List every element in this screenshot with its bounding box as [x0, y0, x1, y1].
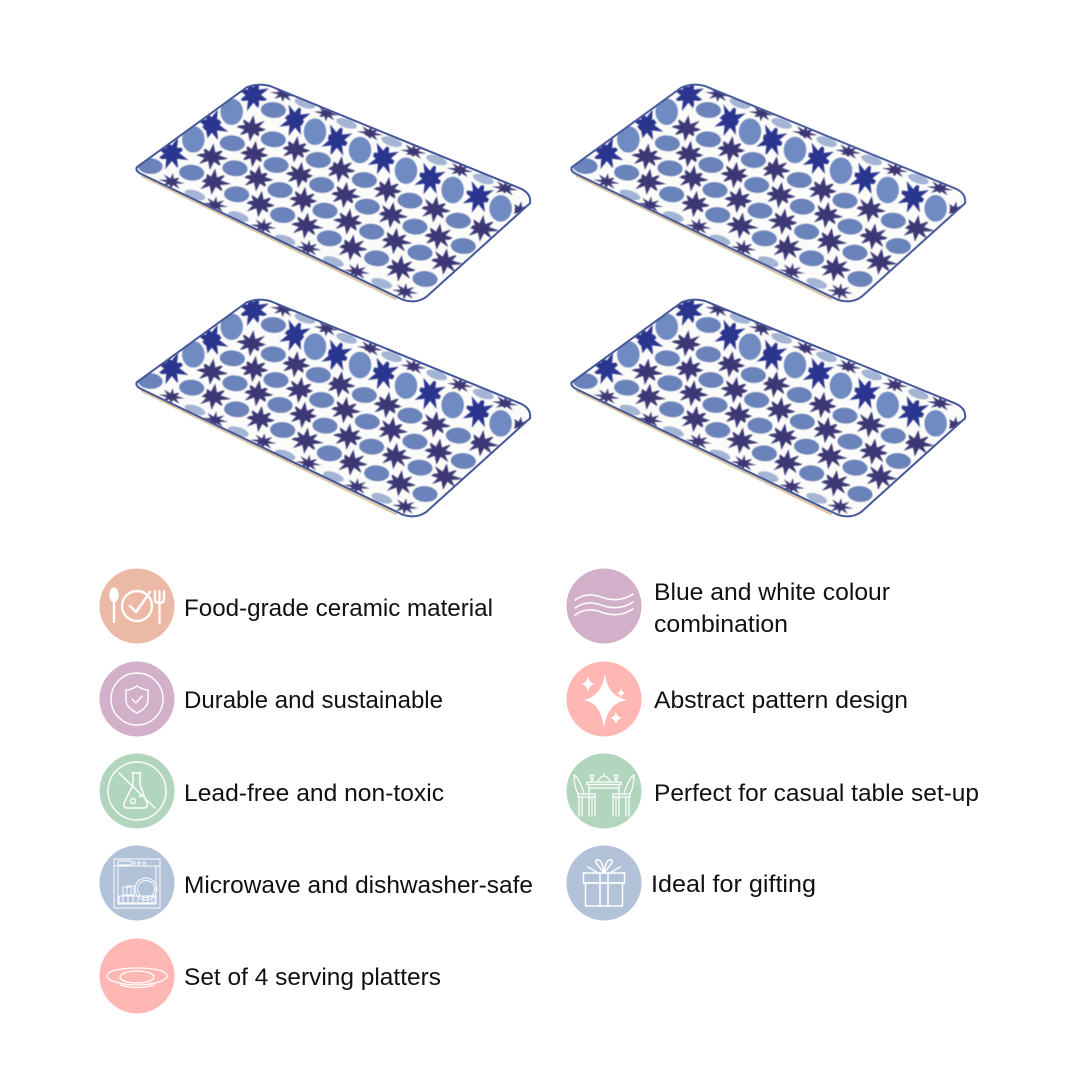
- feature: food-grade ceramic material: [100, 568, 493, 644]
- platter: top right: [570, 72, 969, 302]
- icon: crossed-out flask: [100, 754, 174, 828]
- icon: waves: [566, 568, 642, 644]
- label: table set-up: Perfect for casual table set-up: [654, 780, 979, 807]
- platter: bottom left: [135, 287, 534, 517]
- label: set of 4: Set of 4 serving platters: [184, 964, 441, 991]
- platter: bottom right: [570, 287, 969, 517]
- feature: abstract pattern design: [566, 662, 908, 736]
- label: colour combination: [654, 579, 890, 638]
- label: durable: Durable and sustainable: [184, 687, 443, 714]
- icon: gift box: [566, 846, 642, 920]
- label: gifting: Ideal for gifting: [651, 871, 816, 898]
- label: lead-free: Lead-free and non-toxic: [184, 780, 444, 807]
- feature: microwave and dishwasher-safe: [100, 846, 533, 920]
- platter: top left: [135, 72, 534, 302]
- label: colour combination: combination: [654, 611, 788, 638]
- icon: dishwasher: [100, 846, 174, 920]
- feature: ideal for gifting: [566, 846, 816, 920]
- label: food-grade: Food-grade ceramic material: [184, 595, 493, 622]
- label: microwave: Microwave and dishwasher-safe: [184, 872, 533, 899]
- feature: blue and white colour combination: [566, 568, 890, 644]
- icon: dining table with chairs: [566, 754, 642, 828]
- icon: shield in ring: [100, 662, 174, 736]
- feature: lead-free and non-toxic: [100, 754, 444, 828]
- icon: sparkles: [566, 662, 642, 736]
- icon: plate: [100, 938, 174, 1014]
- feature: casual table set-up: [566, 754, 979, 828]
- feature: set of 4 serving platters: [100, 938, 441, 1014]
- label: colour combination: Blue and white colour: [654, 579, 890, 606]
- icon: plate with check and cutlery: [100, 568, 174, 644]
- label: abstract pattern: Abstract pattern design: [654, 687, 908, 714]
- feature: durable and sustainable: [100, 662, 443, 736]
